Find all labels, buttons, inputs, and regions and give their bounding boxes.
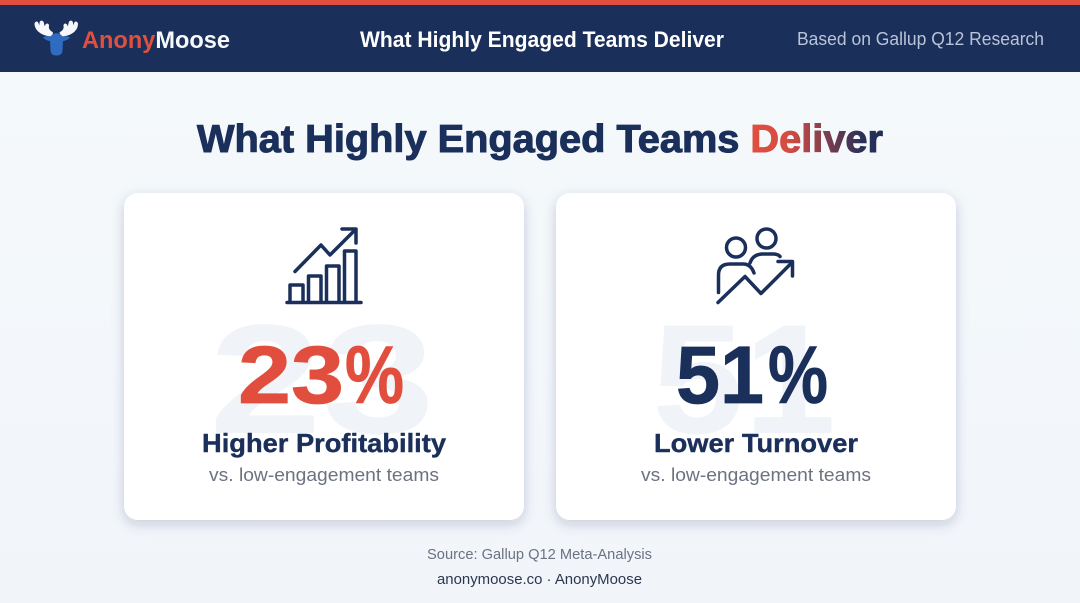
stat 23% xyxy=(238,330,404,421)
stat label: Lower Turnover xyxy=(654,428,858,458)
stat note: vs. low-engagement teams xyxy=(209,465,439,485)
card background xyxy=(124,193,524,520)
ghost number 23: 23 xyxy=(209,293,435,467)
icon: people with rising arrow xyxy=(718,229,792,302)
stat note: vs. low-engagement teams xyxy=(641,465,871,485)
icon: moose logo xyxy=(35,21,78,56)
panel: lower turnover xyxy=(556,193,956,520)
stat label: Higher Profitability xyxy=(202,428,447,458)
ghost number 51: 51 xyxy=(652,293,836,467)
stat 51%: % xyxy=(768,330,828,421)
panel: higher profitability xyxy=(124,193,524,520)
icon: bar chart with rising arrow xyxy=(287,229,361,302)
stat 51% xyxy=(676,330,828,421)
header bar xyxy=(0,0,1080,72)
main heading: What Highly Engaged Teams Deliver xyxy=(197,118,883,161)
stat 51%: 51 xyxy=(676,330,764,421)
header subtitle: Based on Gallup Q12 Research xyxy=(797,29,1044,49)
source line: Source: Gallup Q12 Meta-Analysis xyxy=(427,547,652,563)
logo wordmark: AnonyMoose xyxy=(82,27,230,54)
stat 23%: % xyxy=(345,330,404,421)
stat 23%: 23 xyxy=(238,330,344,421)
footer credit: anonymoose.co · AnonyMoose xyxy=(437,572,642,588)
header title: What Highly Engaged Teams Deliver xyxy=(360,27,724,52)
card background xyxy=(556,193,956,520)
